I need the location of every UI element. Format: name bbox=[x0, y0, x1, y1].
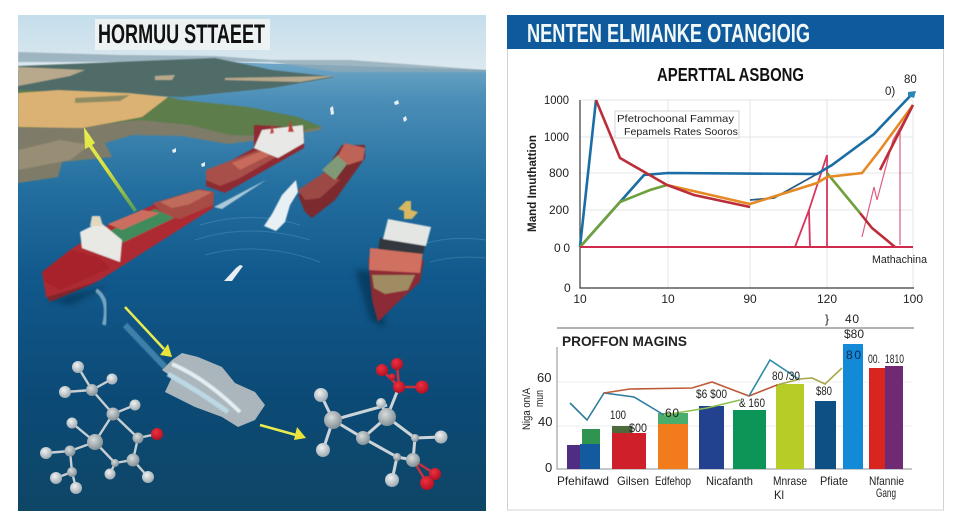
y tick labels: 200 bbox=[549, 203, 569, 217]
legend note bbox=[615, 111, 739, 138]
x tick labels bbox=[573, 292, 923, 306]
tug wake bbox=[264, 180, 298, 231]
bar value labels: 60 bbox=[665, 406, 679, 420]
oil slick bbox=[162, 353, 265, 427]
blue series bbox=[580, 93, 913, 247]
ship wake left bbox=[214, 180, 266, 209]
y tick labels: 40 bbox=[538, 414, 552, 429]
oil discharge trail bbox=[96, 290, 106, 325]
category labels: Gilsen bbox=[617, 474, 649, 488]
sea bbox=[18, 62, 486, 511]
water waves bbox=[195, 218, 486, 262]
chart title: PROFFON MAGINS bbox=[562, 333, 687, 349]
top rule bbox=[557, 327, 914, 329]
molecule: right bbox=[314, 358, 448, 490]
bars bbox=[567, 344, 903, 469]
ship: large left bbox=[42, 189, 214, 302]
baseline series bbox=[580, 246, 913, 248]
bar value labels: 80 /30 bbox=[772, 369, 800, 383]
category labels: Kl bbox=[774, 488, 784, 502]
bar chart bbox=[521, 312, 914, 502]
y axis label: mun bbox=[534, 390, 546, 407]
category labels: Gang bbox=[876, 486, 896, 500]
bar value labels bbox=[610, 312, 904, 435]
arrow: slick to molecule bbox=[260, 425, 306, 440]
y tick labels: 0 bbox=[545, 460, 552, 475]
bar value labels: 40 bbox=[845, 312, 859, 326]
chart title: APERTTAL ASBONG bbox=[657, 65, 804, 85]
red series bbox=[596, 100, 913, 247]
overlay lines bbox=[570, 360, 842, 420]
legend note: Pfetrochoonal Fammay bbox=[617, 113, 735, 125]
end labels: 0) bbox=[885, 86, 895, 98]
category labels: Edfehop bbox=[655, 474, 691, 488]
small boats bbox=[172, 100, 407, 281]
arrow: ship to slick bbox=[125, 307, 172, 357]
x tick labels: 10 bbox=[573, 292, 587, 306]
arrow: headland pointer bbox=[84, 127, 137, 212]
bar value labels: $80 bbox=[816, 384, 832, 398]
y tick labels: 0 0 bbox=[554, 241, 570, 255]
category labels: Nfannie bbox=[869, 474, 904, 488]
ship: rear centre bbox=[206, 120, 304, 193]
bar value labels: 80 bbox=[846, 348, 861, 362]
orange series bbox=[667, 105, 913, 204]
line chart bbox=[525, 65, 928, 306]
bar value labels: 100 bbox=[610, 408, 626, 422]
x tick labels: 90 bbox=[743, 292, 757, 306]
x tick labels: 100 bbox=[903, 292, 923, 306]
y axis label: Niga on/A bbox=[521, 387, 533, 430]
ship shadows bbox=[50, 270, 385, 328]
pink spikes series bbox=[795, 107, 912, 247]
y axis label bbox=[521, 387, 546, 430]
category labels bbox=[557, 474, 904, 502]
peninsula headland bbox=[18, 90, 322, 183]
x tick labels: 10 bbox=[661, 292, 675, 306]
category labels: Mnrase bbox=[773, 474, 807, 488]
green series bbox=[580, 173, 860, 247]
molecule: left bbox=[40, 361, 163, 494]
ship: centre right bbox=[298, 143, 365, 218]
heading: panel banner: NENTEN ELMIANKE OTANGIOIG bbox=[527, 18, 810, 48]
y tick labels: 800 bbox=[549, 166, 569, 180]
ship: front right bbox=[368, 201, 431, 322]
bar value labels: $80 bbox=[844, 327, 864, 341]
x axis series label: Mathachina bbox=[872, 254, 928, 266]
category labels: Pfehifawd bbox=[557, 474, 609, 488]
y tick labels: 1000 bbox=[544, 93, 569, 107]
bar value labels: 00. bbox=[868, 352, 880, 366]
sky bbox=[18, 15, 486, 75]
heading: photo title bbox=[95, 19, 270, 50]
line end markers bbox=[908, 91, 916, 98]
heading: photo title: HORMUU STTAEET bbox=[98, 19, 265, 49]
panel: charts bbox=[507, 15, 944, 510]
legend note: Fepamels Rates Sooros bbox=[624, 126, 738, 138]
end labels: 80 bbox=[904, 74, 917, 86]
dark blue lower series bbox=[667, 174, 817, 207]
bar value labels: & 160 bbox=[739, 396, 765, 410]
y axis label: Mand Imuthattion bbox=[525, 135, 539, 232]
bar value labels: } bbox=[825, 312, 829, 326]
end labels bbox=[885, 74, 917, 98]
axes bbox=[580, 100, 914, 288]
category labels: Pfiate bbox=[820, 474, 848, 488]
y tick labels: 60 bbox=[537, 370, 551, 385]
distant land bbox=[18, 52, 486, 97]
y tick labels: 1000 bbox=[544, 130, 569, 144]
y tick labels: 0 bbox=[564, 281, 571, 295]
bar value labels: 1810 bbox=[885, 352, 904, 366]
axes bbox=[557, 347, 912, 469]
x tick labels: 120 bbox=[817, 292, 837, 306]
panel frame bbox=[508, 16, 944, 510]
bar value labels: $00 bbox=[629, 421, 647, 435]
category labels: Nicafanth bbox=[706, 474, 753, 488]
bar value labels: $6 $00 bbox=[696, 387, 727, 401]
y tick labels bbox=[544, 93, 571, 295]
y tick labels bbox=[537, 370, 552, 475]
trail to slick bbox=[125, 325, 165, 367]
panel: Hormuz strait aerial illustration bbox=[18, 15, 486, 511]
